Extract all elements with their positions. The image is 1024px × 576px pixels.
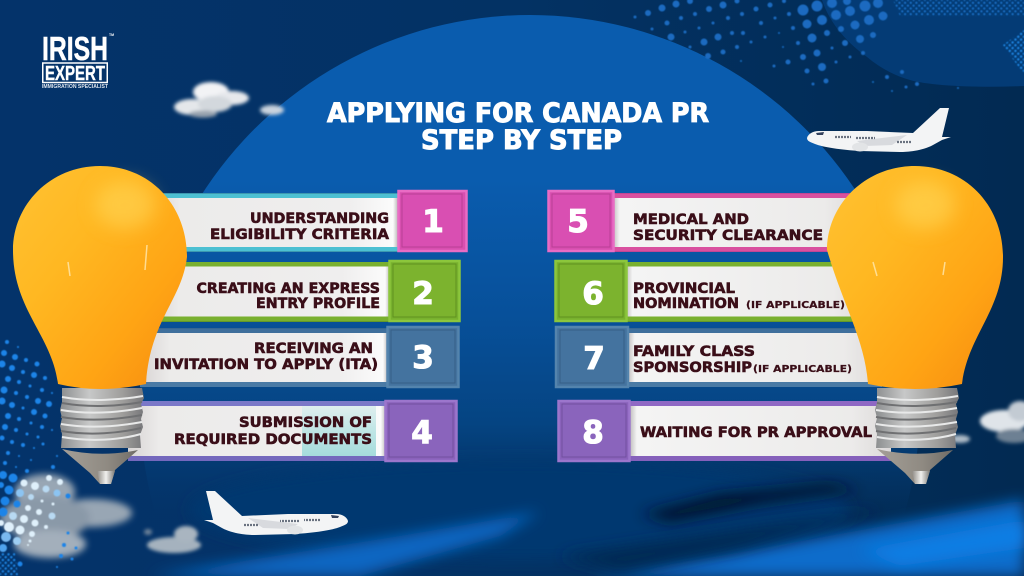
step 8: [558, 401, 891, 461]
bottom light streaks: [150, 460, 1024, 576]
halftone dots: top-right fine: [893, 0, 1024, 74]
logo: Irish Expert: TM: [109, 33, 114, 37]
step 6: PROVINCIAL: [633, 281, 735, 297]
step 1: 1: [422, 204, 444, 240]
step 2: CREATING AN EXPRESS: [196, 281, 380, 297]
cloud: top left small: [260, 105, 284, 115]
step 3: 3: [412, 340, 434, 376]
step 7: (IF APPLICABLE): [753, 364, 852, 375]
step 7: 7: [583, 341, 605, 377]
step 5: MEDICAL AND: [633, 212, 749, 228]
step 2: ENTRY PROFILE: [256, 296, 380, 312]
step 2: [150, 261, 460, 322]
airplane: top right: [807, 108, 951, 152]
light bulb: right: [827, 166, 1003, 484]
step 4: SUBMISSION OF: [239, 415, 372, 431]
cloud: right small: [950, 435, 970, 443]
step 6: 6: [582, 276, 604, 312]
large central circle: [140, 15, 920, 576]
title: [327, 98, 709, 156]
top-right corner shape: [822, 0, 1024, 87]
step 3: RECEIVING AN: [254, 341, 373, 357]
airplane: bottom left: [204, 491, 348, 535]
step 5: 5: [567, 204, 589, 240]
logo: Irish Expert: EXPERT: [45, 63, 105, 85]
step 3: [140, 327, 458, 387]
halftone dots over cloud: [0, 475, 63, 552]
halftone dots: top: [634, 0, 959, 92]
light bulb: left: [13, 166, 187, 484]
step 6: (IF APPLICABLE): [746, 300, 845, 311]
logo: Irish Expert: IRISH: [42, 30, 108, 67]
step 6: NOMINATION: [633, 296, 739, 312]
step 2: 2: [412, 276, 434, 312]
step 4: [128, 401, 456, 461]
title: STEP BY STEP: [421, 125, 622, 156]
cloud: right: [980, 401, 1024, 443]
step 5: [548, 191, 862, 252]
halftone dots: left: [0, 340, 78, 576]
step 3: INVITATION TO APPLY (ITA): [154, 357, 378, 373]
cloud: bottom left large: [0, 474, 132, 558]
step 7: [556, 327, 882, 387]
step 1: ELIGIBILITY CRITERIA: [210, 227, 390, 243]
step 5: SECURITY CLEARANCE: [633, 228, 823, 244]
step 1: UNDERSTANDING: [250, 211, 389, 227]
step 7: FAMILY CLASS: [633, 344, 755, 360]
step 1: [150, 191, 466, 252]
step 7: SPONSORSHIP: [633, 360, 752, 376]
step 6: [556, 261, 870, 322]
step 4: 4: [411, 415, 433, 451]
step 8: 8: [582, 415, 604, 451]
title: APPLYING FOR CANADA PR: [327, 98, 709, 129]
step 4: REQUIRED DOCUMENTS: [174, 432, 372, 448]
logo: Irish Expert: [42, 30, 114, 90]
logo: Irish Expert: IMMIGRATION SPECIALIST: [42, 84, 108, 90]
cloud: top left large: [174, 82, 249, 118]
cloud: bottom small: [144, 526, 201, 553]
step 8: WAITING FOR PR APPROVAL: [640, 425, 872, 441]
